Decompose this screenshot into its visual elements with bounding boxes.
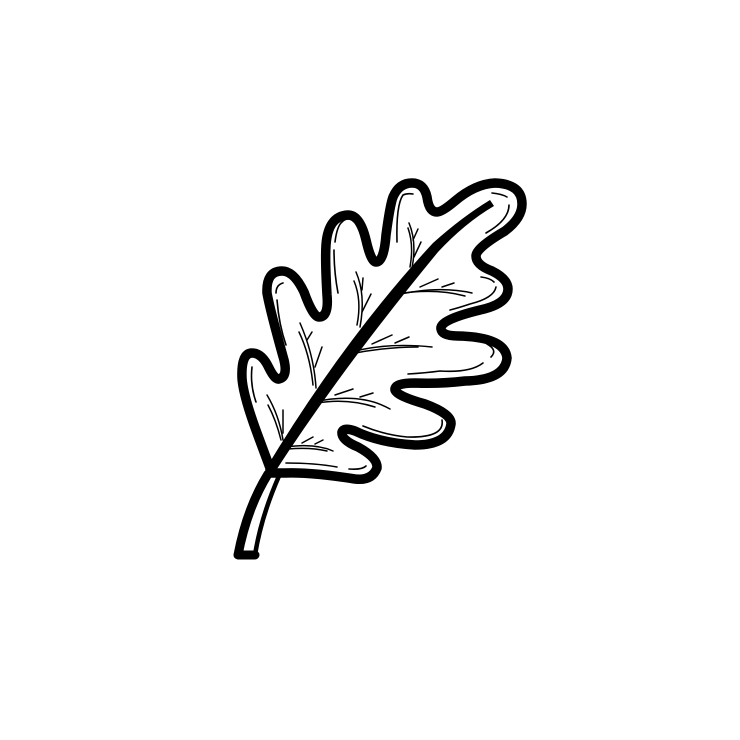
stem bbox=[238, 474, 279, 555]
side veins right bbox=[286, 279, 472, 451]
leaf outline bbox=[242, 183, 522, 479]
contour highlights bbox=[252, 193, 509, 469]
side veins left bbox=[267, 223, 421, 440]
leaf illustration bbox=[238, 183, 522, 555]
midrib bbox=[265, 200, 494, 475]
